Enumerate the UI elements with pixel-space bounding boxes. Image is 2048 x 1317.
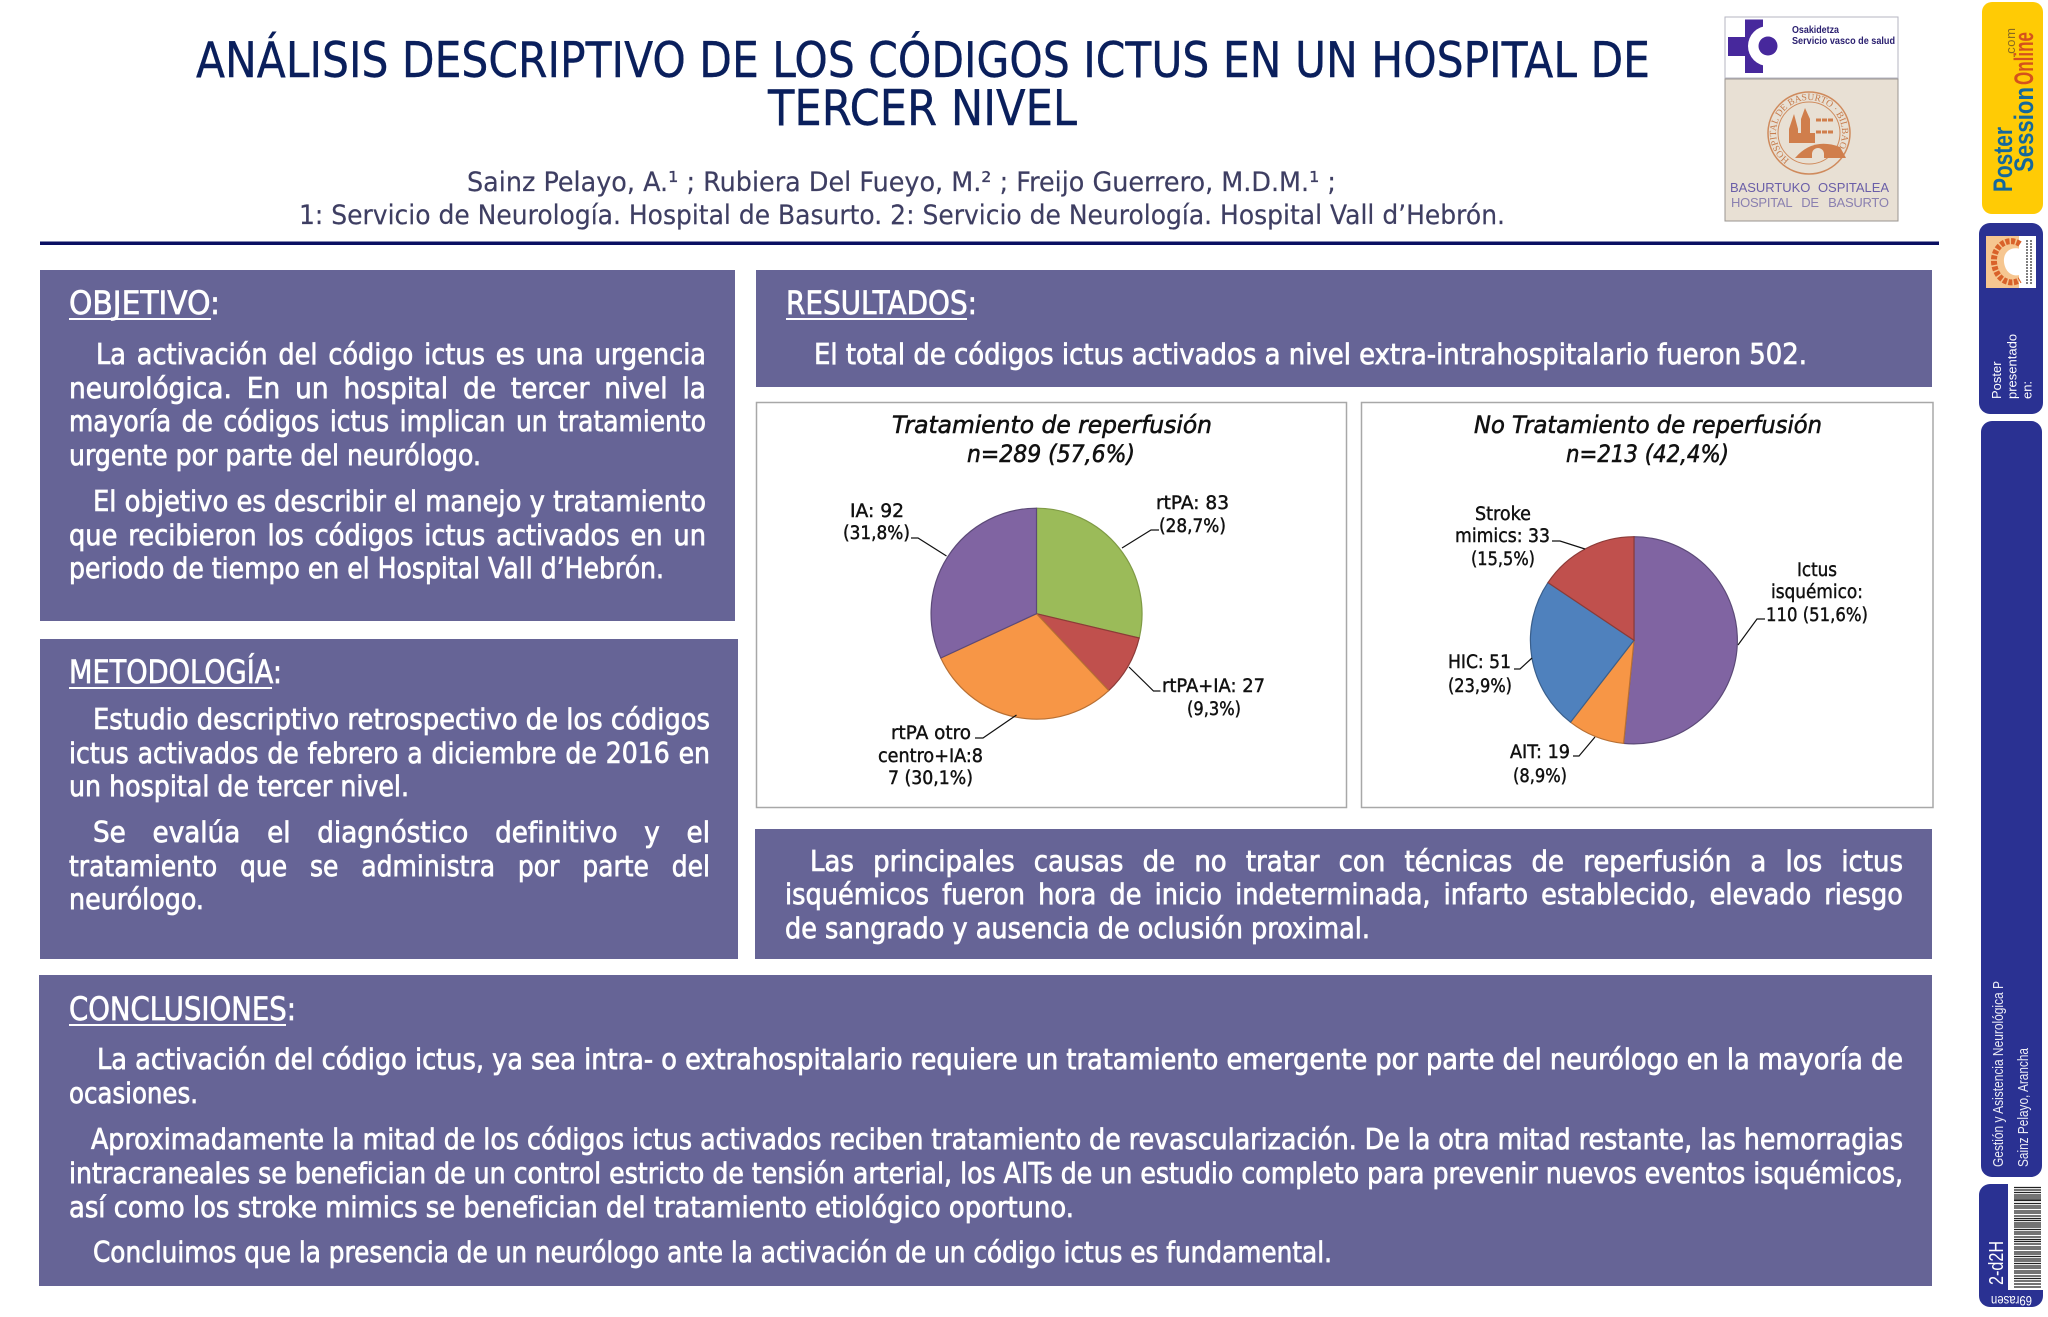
text: metodología: tratamiento que se administra por parte del [69,850,710,883]
label: rtPA+IA [1162,676,1265,720]
label: rtPA otro centro+IA [878,723,983,789]
label: ictus isquémico [1766,560,1868,626]
text: conclusiones [69,1043,1903,1269]
pie chart [1530,537,1737,744]
text: objetivo: periodo de tiempo en el Hospital Vall d’Hebrón. [69,552,664,585]
text: objetivo: neurológica. En un hospital de tercer nivel la [69,372,706,405]
icon: brain logo [1986,236,2036,288]
text: objetivo: El objetivo es describir el manejo y tratamiento [93,485,706,518]
text: metodología [69,703,710,916]
panel: causas de no tratar [755,829,1932,959]
sidebar: session and author: Sainz Pelayo, Arancha [2015,1047,2032,1167]
sidebar: barcode block [1979,1184,2043,1309]
chart title: n=213 (42,4%) [1566,440,1729,468]
chart title: n=289 (57,6%) [967,440,1135,468]
sidebar: session and author: Gestión y Asistencia Neurológica P [1990,981,2007,1167]
sidebar: poster presentado en [1979,223,2043,414]
heading: objetivo: OBJETIVO: [69,284,220,322]
header: title: ANÁLISIS DESCRIPTIVO DE LOS CÓDIGOS ICTUS EN UN HOSPITAL DE [196,30,1650,89]
heading: conclusiones: CONCLUSIONES: [69,990,296,1028]
sidebar: session and author [1981,421,2042,1177]
leader lines [1514,541,1765,756]
sidebar: PosterSessionOnline logo: Online [2009,32,2039,85]
label: rtPA [1156,493,1229,537]
logo: Hospital de Basurto: BASURTUKO OSPITALEA [1730,180,1889,195]
text: objetivo [69,338,706,585]
label: stroke mimics: Stroke [1475,504,1531,525]
text: metodología: neurólogo. [69,883,204,916]
panel: objetivo [40,270,735,621]
chart title [892,411,1212,468]
sidebar: poster presentado en: en: [2020,381,2034,399]
heading: resultados: RESULTADOS: [786,284,977,322]
label: AIT: AIT: 19 [1510,742,1570,763]
logo: Osakidetza [1725,17,1898,78]
sidebar: barcode block: 69rasen [1991,1293,2032,1309]
text: metodología: Se evalúa el diagnóstico definitivo y el [93,816,710,849]
logo: Hospital de Basurto: HOSPITAL DE BASURTO · BILBAO · [1770,94,1848,164]
text: conclusiones: La activación del código ictus, ya sea intra- o extrahospitalario requiere un tratamiento emergente por parte del neurólogo en la mayoría de [97,1043,1903,1076]
label: HIC: HIC: 51 [1448,652,1511,673]
label: IA [843,501,910,544]
sidebar: poster presentado en: Poster [1989,361,2004,399]
label: HIC: (23,9%) [1448,676,1512,697]
logo: Osakidetza: Servicio vasco de salud [1792,35,1895,47]
chart title: No Tratamiento de reperfusión [1474,411,1822,439]
label: AIT: (8,9%) [1513,766,1567,787]
sidebar: PosterSessionOnline logo: .com [2003,28,2018,58]
logo: Hospital de Basurto: HOSPITAL DE BASURTO [1731,195,1889,210]
logo: Osakidetza: Osakidetza [1792,24,1839,36]
panel: causas de no tratar: Las principales causas de no tratar con técnicas de reperfusión a los ictus [810,845,1903,878]
label: stroke mimics: mimics: 33 [1455,526,1550,547]
icon: barcode [2014,1188,2041,1287]
text: total de códigos: El total de códigos ictus activados a nivel extra-intrahospitalario fueron 502. [814,338,1807,371]
authors and affiliations: Sainz Pelayo, A.¹ ; Rubiera Del Fueyo, M.² ; Freijo Guerrero, M.D.M.¹ ; [467,167,1336,198]
panel: metodología [40,639,738,959]
chart: no tratamiento de reperfusión [1362,402,1933,808]
label: rtPA: (28,7%) [1159,516,1226,537]
leader lines [911,530,1160,738]
text: metodología: Estudio descriptivo retrospectivo de los códigos [93,703,710,736]
panel: causas de no tratar: isquémicos fueron hora de inicio indeterminada, infarto establecido, elevado riesgo [785,878,1903,911]
text: metodología: ictus activados de febrero a diciembre de 2016 en [69,737,710,770]
sidebar: PosterSessionOnline logo [1982,2,2043,214]
label: rtPA otro centro+IA: centro+IA:8 [878,746,983,767]
header: title: TERCER NIVEL [767,80,1078,137]
label: IA: IA: 92 [850,501,904,522]
sidebar: poster presentado en: presentado [2004,334,2020,399]
label: ictus isquémico: 110 (51,6%) [1766,605,1868,626]
text: conclusiones: Concluimos que la presencia de un neurólogo ante la activación de un código ictus es fundamental. [93,1236,1332,1269]
heading: metodología: METODOLOGÍA: [69,653,282,691]
label: rtPA+IA: (9,3%) [1187,699,1241,720]
authors and affiliations: 1: Servicio de Neurología. Hospital de Basurto. 2: Servicio de Neurología. Hospital Vall d’Hebrón. [299,200,1505,231]
label: HIC [1448,652,1512,697]
text: conclusiones: ocasiones. [69,1077,198,1110]
label: stroke mimics: (15,5%) [1471,549,1535,570]
sidebar: PosterSessionOnline logo: Session [2009,87,2039,172]
label: AIT [1510,742,1570,787]
label: ictus isquémico: isquémico: [1771,582,1863,603]
panel: conclusiones [39,975,1932,1286]
text: objetivo: mayoría de códigos ictus implican un tratamiento [69,405,706,438]
text: conclusiones: así como los stroke mimics se benefician del tratamiento etiológico oportuno. [69,1191,1074,1224]
label: rtPA otro centro+IA: 7 (30,1%) [888,768,973,789]
text: objetivo: La activación del código ictus es una urgencia [96,338,706,371]
label: rtPA: rtPA: 83 [1156,493,1229,514]
chart title [1474,411,1822,468]
text: objetivo: urgente por parte del neurólogo. [69,439,481,472]
sidebar: barcode block: 2-d2H [1986,1241,2008,1285]
chart title: Tratamiento de reperfusión [892,411,1212,439]
label: rtPA otro centro+IA: rtPA otro [891,723,971,744]
text: objetivo: que recibieron los códigos ictus activados en un [69,519,706,552]
header: title [196,30,1650,137]
pie chart [931,508,1142,719]
label: IA: (31,8%) [843,523,910,544]
text: metodología: un hospital de tercer nivel. [69,770,409,803]
sidebar: PosterSessionOnline logo: Poster [1988,127,2018,192]
label: rtPA+IA: rtPA+IA: 27 [1162,676,1265,697]
label: stroke mimics [1455,504,1550,570]
authors and affiliations [299,167,1505,231]
label: ictus isquémico: Ictus [1797,560,1837,581]
logo: Hospital de Basurto [1724,78,1898,222]
panel: causas de no tratar: de sangrado y ausencia de oclusión proximal. [785,912,1370,945]
panel: resultados [756,270,1932,387]
chart: tratamiento de reperfusión [756,402,1346,808]
